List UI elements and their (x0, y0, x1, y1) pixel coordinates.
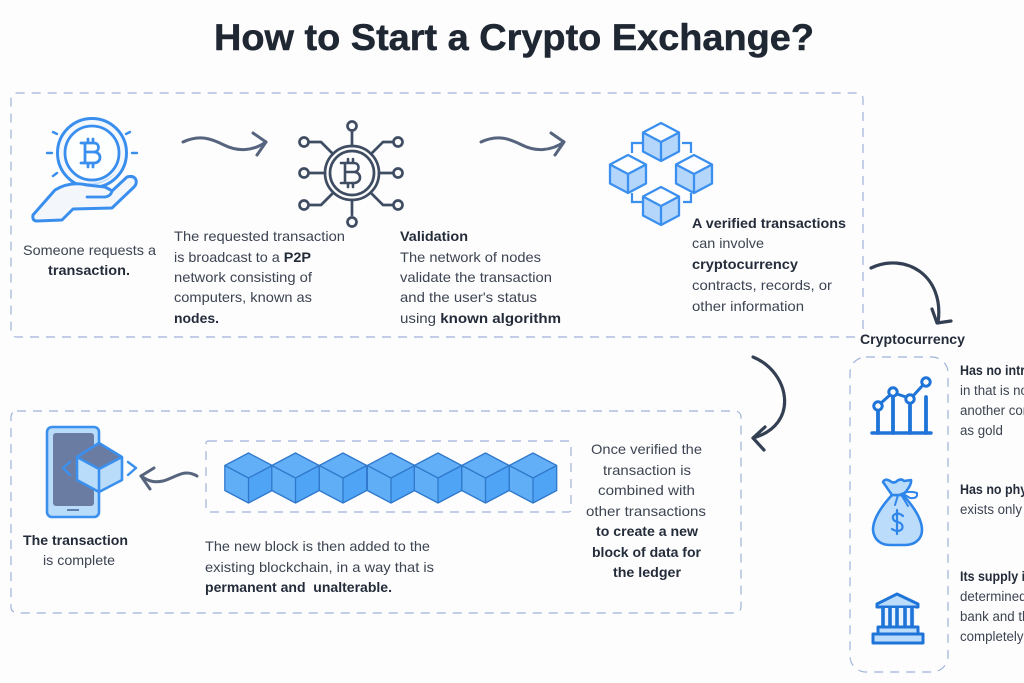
text: validation step: using known algorithm (400, 310, 561, 326)
text: new block added (205, 538, 434, 595)
text: step one: transaction. (48, 262, 130, 278)
text: once verified: block of data for (592, 544, 702, 560)
text: verified transactions: other information (692, 298, 804, 314)
text: once verified (586, 441, 706, 580)
text: verified transactions: cryptocurrency (692, 256, 798, 272)
text: step two: nodes. (174, 310, 219, 326)
text: new block added: The new block is then added to the (205, 538, 430, 554)
text: once verified: combined with (598, 482, 695, 498)
panel: transaction flow (11, 93, 863, 337)
icon: growth chart (872, 378, 931, 433)
panel: blockchain (206, 441, 571, 512)
icon: hand holding bitcoin (33, 118, 137, 221)
text: validation step (400, 228, 561, 326)
text: step two: is broadcast to a P2P (174, 249, 311, 265)
text: new block added: existing blockchain, in a way that is (205, 559, 434, 575)
panel: cryptocurrency icons (850, 357, 948, 672)
heading: cryptocurrency: Cryptocurrency (860, 331, 965, 347)
text: verified transactions: A verified transactions (692, 215, 846, 231)
text: intrinsic value note (960, 362, 1024, 438)
text: step one (23, 242, 156, 278)
text: transaction complete: The transaction (23, 532, 128, 548)
icon: node network (300, 122, 402, 226)
arrow: to new block (753, 357, 785, 450)
text: verified transactions (692, 215, 846, 314)
text: step two: The requested transaction (174, 228, 345, 244)
title: How to Start a Crypto Exchange? (214, 17, 814, 58)
text: once verified: other transactions (586, 503, 706, 519)
icon: phone with cube (47, 427, 136, 517)
text: step two (174, 228, 345, 326)
text: supply note (960, 568, 1024, 644)
text: physical form note (960, 481, 1024, 517)
text: validation step: and the user's status (400, 289, 537, 305)
panel: completed block flow (11, 411, 741, 613)
icon: connected cubes (610, 123, 712, 225)
text: transaction complete: is complete (43, 552, 115, 568)
text: validation step: Validation (400, 228, 468, 244)
arrow: step one to two (183, 133, 266, 155)
arrow: step two to three (481, 133, 564, 155)
text: step two: network consisting of (174, 269, 312, 285)
text: transaction complete (23, 532, 128, 568)
text: once verified: transaction is (603, 462, 691, 478)
text: validation step: validate the transaction (400, 269, 552, 285)
text: new block added: permanent and unalterable. (205, 579, 392, 595)
icon: money bag (873, 480, 922, 545)
text: verified transactions: contracts, records, or (692, 277, 832, 293)
icon: bank (873, 594, 923, 643)
chain of blocks (225, 453, 557, 503)
text: intrinsic value note: as gold (960, 423, 1003, 438)
text: step two: computers, known as (174, 289, 312, 305)
arrow: to completed transaction (141, 468, 197, 489)
text: verified transactions: can involve (692, 235, 764, 251)
text: once verified: the ledger (613, 564, 682, 580)
text: once verified: Once verified the (591, 441, 702, 457)
arrow: to cryptocurrency (871, 263, 951, 323)
text: validation step: The network of nodes (400, 249, 541, 265)
text: step one: Someone requests a (23, 242, 156, 258)
text: once verified: to create a new (596, 523, 698, 539)
